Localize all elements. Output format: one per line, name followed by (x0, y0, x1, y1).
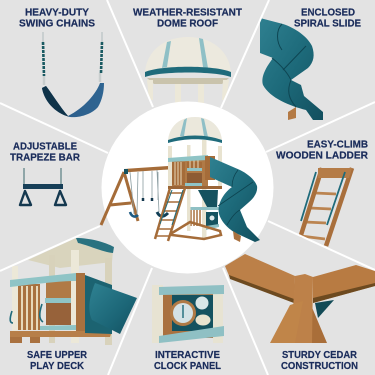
heading: cedar construction (281, 350, 358, 372)
panel: spiral slide (260, 8, 361, 120)
icon: ladder (301, 168, 352, 246)
heading: trapeze bar: TRAPEZE BAR (10, 152, 80, 164)
heading: wooden ladder: EASY-CLIMB (307, 140, 368, 150)
heading: trapeze bar (10, 142, 80, 164)
panel: wooden ladder (276, 140, 368, 246)
heading: dome roof: DOME ROOF (157, 18, 218, 30)
swing beam and A-frame (101, 166, 168, 225)
heading: wooden ladder (276, 140, 368, 162)
icon: play deck (10, 238, 137, 345)
panel: trapeze bar (10, 142, 80, 205)
heading: spiral slide (294, 8, 361, 30)
center circle (102, 102, 274, 274)
heading: play deck (27, 350, 87, 372)
tower dome (168, 117, 222, 143)
heading: clock panel: INTERACTIVE (155, 350, 220, 361)
swings (130, 170, 168, 217)
heading: spiral slide: SPIRAL SLIDE (294, 18, 361, 30)
panel: clock panel (152, 285, 224, 372)
heading: wooden ladder: WOODEN LADDER (276, 150, 368, 162)
icon: swing seat (42, 32, 104, 117)
tower cabin (168, 155, 222, 189)
heading: dome roof: WEATHER-RESISTANT (133, 8, 242, 18)
heading: dome roof (133, 8, 242, 30)
tube slide (210, 157, 260, 242)
heading: play deck: PLAY DECK (30, 361, 84, 372)
heading: clock panel (154, 350, 221, 372)
central playset illustration (101, 117, 260, 242)
lower slide section (198, 190, 218, 208)
heading: spiral slide: ENCLOSED (301, 8, 355, 18)
tower ladder (155, 188, 185, 241)
heading: clock panel: CLOCK PANEL (154, 361, 221, 372)
wooden base (172, 222, 221, 239)
panel: play deck (10, 238, 137, 372)
icon: trapeze bar (20, 168, 66, 205)
panel: cedar construction (225, 254, 375, 372)
icon: clock panel (152, 285, 224, 343)
lower clock panel (187, 207, 219, 231)
heading: play deck: SAFE UPPER (27, 350, 87, 361)
heading: cedar construction: STURDY CEDAR (282, 350, 357, 361)
tower posts (168, 140, 222, 238)
heading: swing chains: HEAVY-DUTY (25, 8, 89, 18)
panel: dome roof (133, 8, 242, 106)
heading: trapeze bar: ADJUSTABLE (13, 142, 77, 153)
heading: swing chains (19, 8, 95, 30)
panel: swing chains (19, 8, 104, 117)
icon: cedar beams (225, 254, 375, 343)
heading: swing chains: SWING CHAINS (19, 18, 95, 30)
icon: spiral slide (260, 18, 323, 120)
heading: cedar construction: CONSTRUCTION (281, 361, 358, 372)
icon: dome roof (145, 37, 231, 106)
